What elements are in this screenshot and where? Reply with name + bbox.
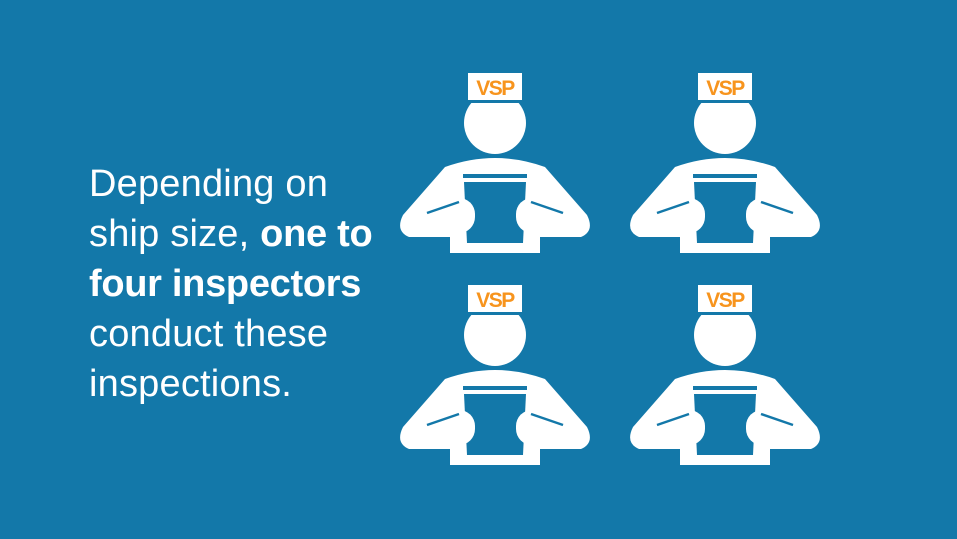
icon: inspector bottom-left: [400, 285, 590, 465]
icon: inspector bottom-right: [630, 285, 820, 465]
text block: description: ship size, one to: [89, 213, 372, 255]
text block: description: four inspectors: [89, 263, 361, 305]
text block: description: [89, 163, 372, 405]
icon: inspector top-left: [400, 73, 590, 253]
icon: inspector top-right: [630, 73, 820, 253]
text block: description: conduct these: [89, 313, 328, 355]
text block: description: Depending on: [89, 163, 328, 205]
text block: description: inspections.: [89, 363, 292, 405]
